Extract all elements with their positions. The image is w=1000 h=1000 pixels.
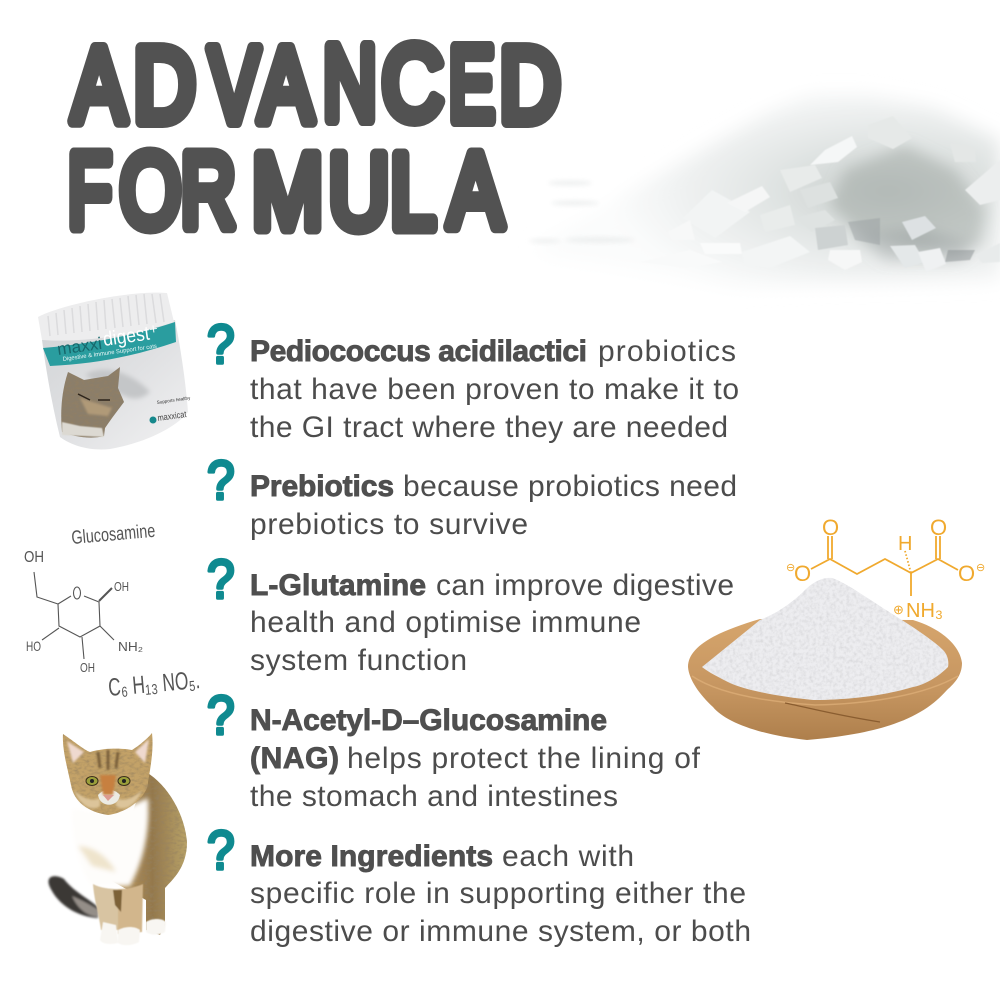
diagram: glucosamine molecule: Glucosamine — [71, 521, 156, 549]
amino acid molecule: ⊕ — [893, 602, 904, 617]
text block: Pediococcus: Pediococcus acidilactici — [250, 335, 587, 368]
image: cat — [48, 733, 187, 945]
amino acid molecule: ⊖ — [786, 562, 795, 574]
icon: question mark 2: ? — [207, 451, 235, 512]
text block: Prebiotics: Prebiotics — [250, 470, 394, 503]
amino acid molecule — [786, 515, 985, 622]
icon: question mark 5: ? — [207, 821, 235, 882]
cat head — [63, 733, 153, 815]
text block: NAG: helps protect the lining of — [347, 742, 701, 775]
title: A — [72, 26, 126, 144]
jar label text — [56, 321, 191, 423]
text block: More Ingredients: digestive or immune system, or both — [250, 915, 751, 948]
title: L — [390, 133, 436, 251]
title: D — [134, 26, 196, 144]
text block: Pediococcus: the GI tract where they are needed — [250, 411, 728, 444]
title: M — [252, 133, 323, 251]
text block: More Ingredients: each with — [502, 840, 634, 873]
cat forelegs — [93, 884, 143, 934]
title: V — [209, 26, 260, 144]
jar cat photo — [61, 367, 124, 438]
diagram: glucosamine molecule: OH — [80, 660, 95, 675]
jar label text: Supports healthy — [156, 395, 191, 405]
amino acid molecule: O — [958, 561, 975, 586]
image: pile of white flakes — [529, 95, 1000, 287]
text block: More Ingredients: specific role in supporting either the — [250, 877, 746, 910]
title: N — [323, 24, 377, 142]
text block: More Ingredients — [250, 840, 751, 948]
icon: question mark 1: ? — [207, 315, 235, 376]
amino acid molecule: O — [822, 515, 839, 540]
text block: Prebiotics: because probiotics need — [403, 470, 737, 503]
icon: question mark 3: ? — [207, 550, 235, 611]
cat body — [110, 772, 187, 935]
diagram: glucosamine molecule: OH — [24, 549, 44, 566]
title: R — [181, 132, 236, 250]
text block: NAG: the stomach and intestines — [250, 780, 618, 813]
amino acid molecule: O — [930, 515, 947, 540]
diagram: glucosamine molecule — [24, 521, 201, 702]
text block: NAG: N-Acetyl-D–Glucosamine — [250, 704, 607, 737]
title: F — [68, 132, 112, 250]
text block: Pediococcus: that have been proven to make it to — [250, 373, 739, 406]
text block: More Ingredients: More Ingredients — [250, 840, 493, 873]
jar label text: maxxi — [56, 334, 103, 359]
jar lid — [38, 293, 174, 341]
text block: NAG — [250, 704, 701, 813]
diagram: glucosamine molecule: NH₂ — [118, 639, 143, 654]
text block: Pediococcus — [250, 335, 739, 444]
image: powder in wooden bowl — [688, 515, 985, 740]
title: A — [259, 26, 313, 144]
icon: question mark 4: ? — [207, 686, 235, 747]
title — [68, 24, 560, 251]
title: D — [500, 26, 560, 144]
bowl — [688, 619, 962, 740]
title: A — [448, 132, 503, 250]
text block: L-Glutamine: system function — [250, 644, 467, 677]
title: O — [120, 132, 181, 250]
text block: L-Glutamine: can improve digestive — [436, 569, 734, 602]
diagram: glucosamine molecule: HO — [26, 638, 41, 654]
amino acid molecule: NH₃ — [906, 600, 943, 622]
text block: L-Glutamine: health and optimise immune — [250, 606, 641, 639]
title: E — [449, 26, 495, 144]
image: product jar — [38, 293, 191, 449]
diagram: glucosamine molecule: OH — [114, 579, 129, 594]
jar label text: maxxicat — [157, 409, 187, 423]
text block: L-Glutamine: L-Glutamine — [250, 569, 426, 602]
text block: Prebiotics: prebiotics to survive — [250, 508, 528, 541]
title: U — [328, 133, 390, 251]
cat chest — [72, 798, 148, 886]
cat tail — [48, 876, 99, 918]
powder — [702, 578, 948, 700]
text block: L-Glutamine — [250, 569, 734, 677]
text block: Pediococcus: probiotics — [598, 335, 736, 368]
text block: NAG: (NAG) — [250, 742, 339, 775]
text block: Prebiotics — [250, 470, 737, 541]
amino acid molecule: H — [898, 533, 912, 555]
jar label text: digest⁺ — [102, 321, 160, 351]
amino acid molecule: O — [794, 561, 811, 586]
jar label text: Digestive & Immune Support for cats — [62, 344, 157, 363]
amino acid molecule: ⊖ — [976, 562, 985, 574]
jar pillow shadow — [85, 370, 150, 398]
diagram: glucosamine molecule: C₆ H₁₃ NO₅. — [107, 666, 201, 702]
title: C — [382, 24, 443, 142]
